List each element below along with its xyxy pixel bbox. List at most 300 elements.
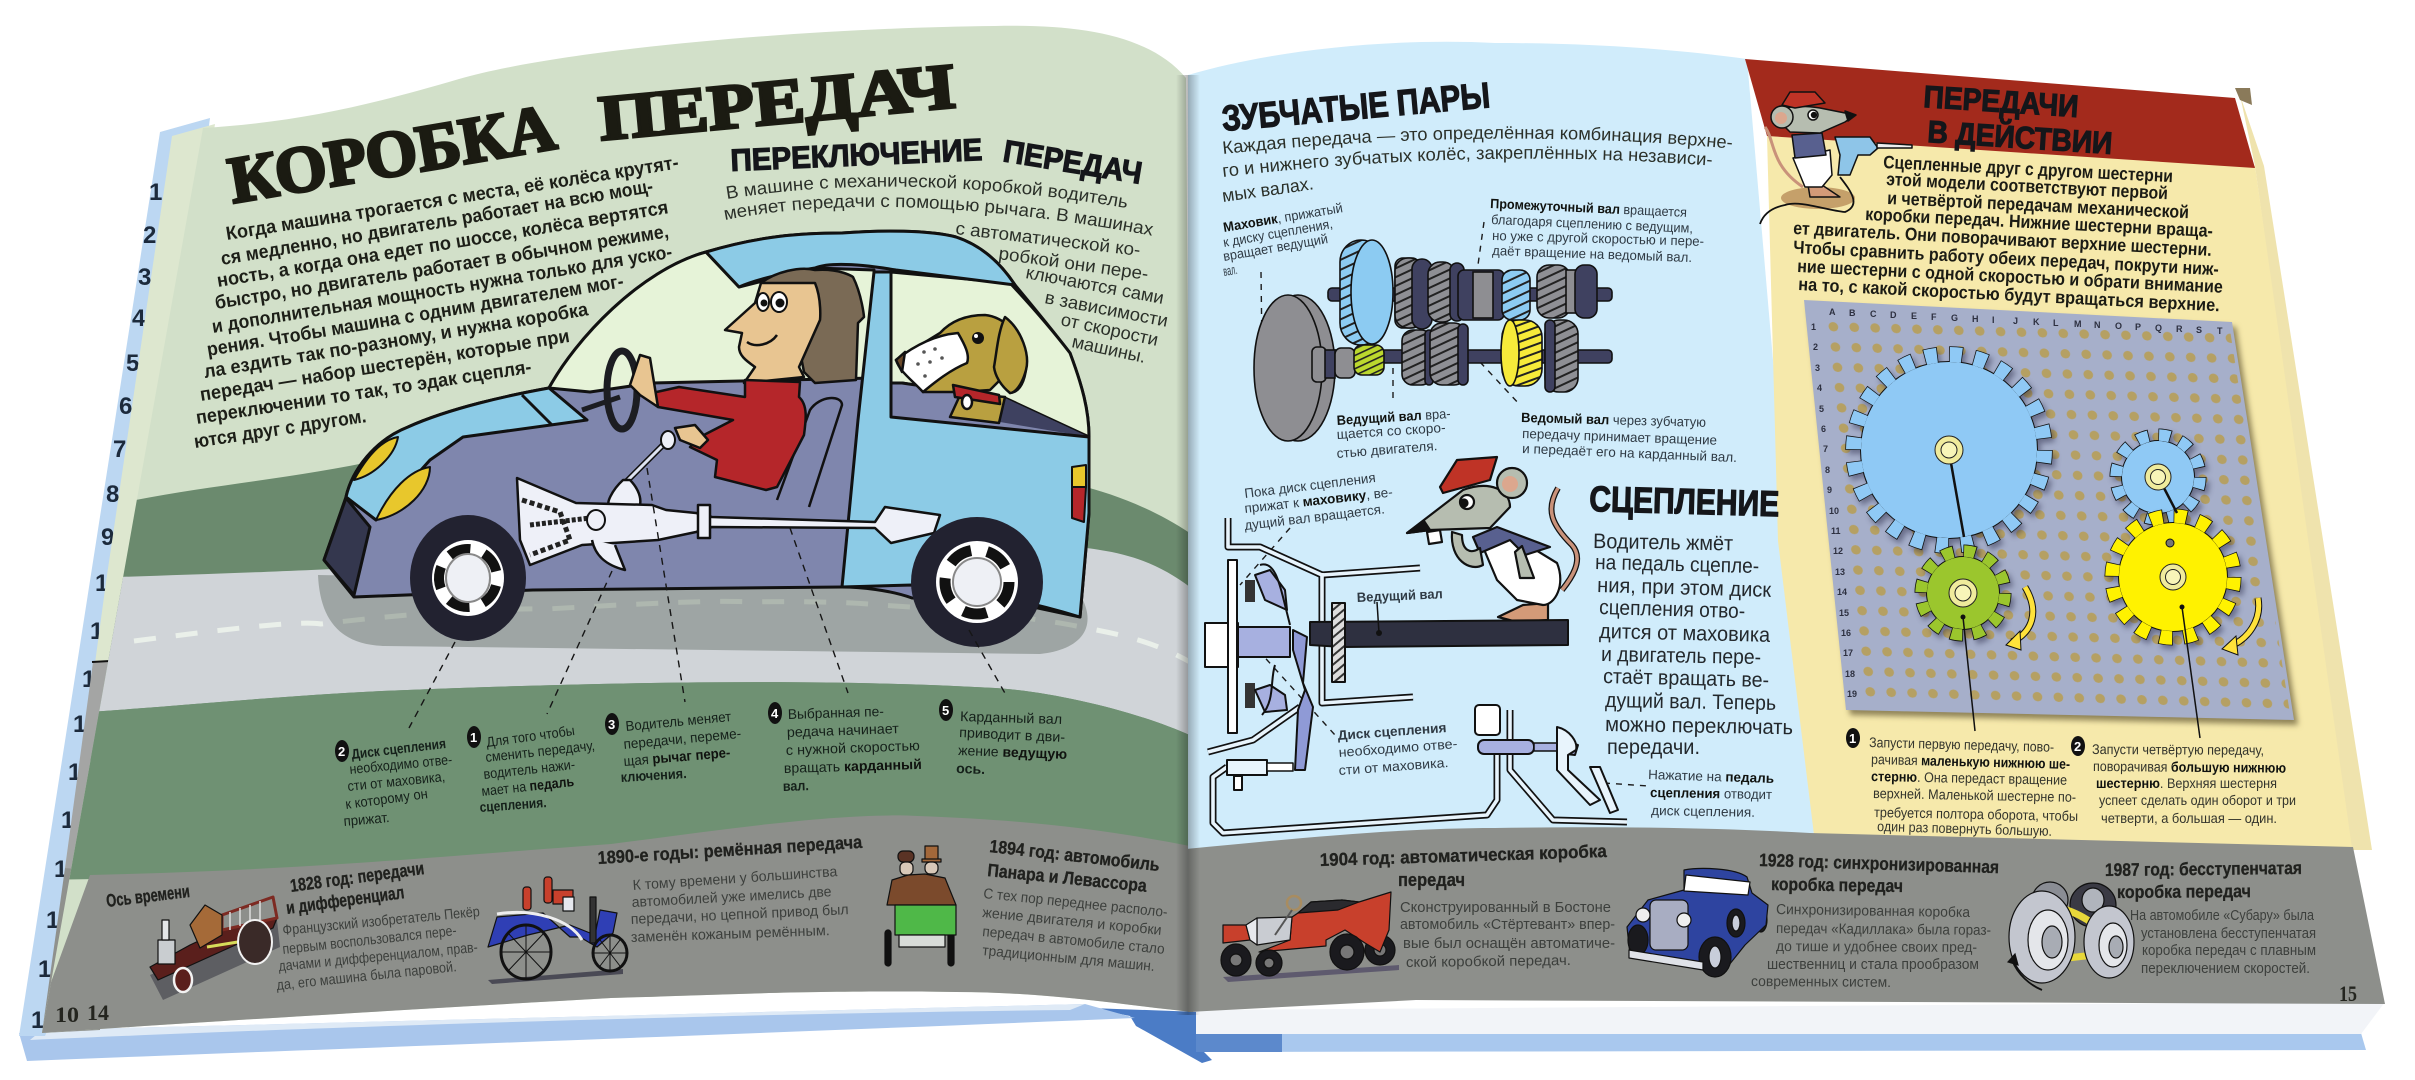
countershaft caption: Промежуточный вал вращается — [1490, 196, 1687, 220]
entry 1928: 1928 год: синхронизированная — [1759, 850, 1999, 877]
row numbers: 7 — [1823, 444, 1828, 454]
entry 1890s: 1890-е годы: ремённая передача — [597, 832, 864, 868]
row numbers: 14 — [1837, 587, 1847, 597]
left page stack with number index: 14 — [68, 759, 95, 786]
instructions — [1846, 728, 2296, 839]
step 3: ключения. — [620, 765, 687, 785]
intro text: ла ездить так по-разному, и нужна коробка — [202, 299, 590, 383]
step 4: Выбранная пе- — [788, 703, 884, 722]
step 5: ось. — [956, 760, 985, 777]
output shaft caption — [1521, 410, 1737, 465]
instruction 1: требуется полтора оборота, чтобы — [1874, 804, 2078, 824]
last grey gear — [1545, 320, 1578, 392]
row numbers: 15 — [1839, 608, 1849, 618]
panel: left page — [42, 26, 1193, 1033]
entry 1904: вые был оснащён автоматиче- — [1403, 936, 1615, 952]
step 5 — [939, 699, 1067, 777]
step 2: сти от маховика, — [347, 768, 446, 794]
column letters: G — [1951, 313, 1958, 323]
clutch text: дущий вал. Теперь — [1605, 689, 1776, 715]
step 2: необходимо отве- — [349, 751, 453, 777]
page number right: 15 — [2339, 981, 2357, 1006]
green gear — [1921, 551, 2005, 635]
input shaft caption: Ведущий вал вра- — [1336, 406, 1451, 428]
upper shaft — [1328, 288, 1612, 301]
column letters: Q — [2155, 323, 2162, 333]
column letters — [1829, 307, 2223, 336]
entry 1894: передач в автомобиле стало — [982, 924, 1165, 958]
paper edge — [2240, 95, 2372, 850]
left page stack with number index: 7 — [113, 436, 126, 463]
step 2: к которому он — [344, 785, 429, 812]
output shaft caption: и передаёт его на карданный вал. — [1522, 441, 1737, 465]
windshield — [549, 252, 874, 392]
pedal master cylinder — [1475, 705, 1500, 735]
clutch disk label — [1337, 720, 1458, 778]
heading: gears in action: ПЕРЕДАЧИ — [1923, 79, 2079, 124]
step 5: Карданный вал — [960, 708, 1062, 727]
clutch caption: Пока диск сцепления — [1244, 470, 1376, 501]
instruction 1: рачивая маленькую нижнюю ше- — [1871, 751, 2071, 772]
gears in action text: и четвёртой передачам механической — [1887, 188, 2189, 222]
callouts: numbered steps — [335, 699, 1067, 829]
flywheel caption: вал. — [1222, 262, 1238, 279]
car shadow — [318, 575, 1088, 654]
white block — [1205, 623, 1238, 667]
left page stack with number index: 2 — [143, 222, 156, 249]
intro text: переключении то так, то эдак сцепля- — [195, 357, 533, 429]
step 4: 4 — [771, 706, 779, 721]
column letters: H — [1972, 314, 1978, 324]
step 5: жение ведущую — [958, 742, 1067, 762]
timeline: left page — [105, 832, 1168, 994]
clutch text: сцепления отво- — [1599, 596, 1745, 623]
clutch caption: прижат к маховику, ве- — [1244, 484, 1393, 516]
row numbers: 13 — [1835, 567, 1845, 577]
board — [1804, 300, 2294, 720]
cream panel — [1767, 136, 2352, 848]
pedal label: Нажатие на педаль — [1648, 767, 1774, 786]
arm — [1515, 546, 1534, 578]
instruction 2: 2 — [2074, 739, 2081, 754]
output shaft caption: передачу принимает вращение — [1522, 426, 1717, 448]
entry 1894: 1894 год: автомобиль — [989, 836, 1161, 875]
gear pairs text: Каждая передача — это определённая комбинация верхне- — [1223, 126, 1732, 154]
entry 1987: установлена бесступенчатая — [2141, 926, 2316, 942]
entry 1904 — [1319, 841, 1615, 971]
entry 1890s — [597, 832, 864, 946]
ear — [1497, 468, 1527, 498]
roof — [706, 231, 1015, 287]
heading: clutch: СЦЕПЛЕНИЕ — [1589, 478, 1780, 524]
teeth — [1427, 530, 1442, 544]
yellow gear — [1502, 320, 1542, 386]
clutch text: передачи. — [1607, 736, 1700, 759]
column letters: R — [2176, 324, 2183, 334]
entry 1928: передач «Кадиллака» была гораз- — [1776, 921, 1991, 939]
entry 1928 — [1751, 850, 1999, 991]
gear shifting text: меняет передачи с помощью рычага. В машинах — [724, 197, 1154, 236]
intro text: Когда машина трогается с места, её колёса крутят- — [224, 153, 680, 245]
page title: КОРОБКА — [223, 91, 561, 218]
shirt — [1473, 527, 1550, 555]
row numbers: 5 — [1819, 404, 1824, 414]
row numbers: 6 — [1821, 424, 1826, 434]
clutch text: Водитель жмёт — [1593, 530, 1734, 555]
left cover — [19, 1004, 1135, 1061]
row numbers: 18 — [1845, 669, 1855, 679]
right passenger — [925, 846, 938, 861]
intro text: передач — набор шестерён, которые при — [198, 326, 571, 406]
grey gears right upper — [1537, 265, 1570, 318]
instruction 2: поворачивая большую нижнюю — [2093, 758, 2286, 776]
hood — [346, 388, 587, 520]
front wheel — [410, 515, 526, 641]
small blue gear — [1502, 270, 1530, 320]
cap — [1782, 92, 1825, 108]
intro text: и дополнительная мощность нужна только для уско- — [210, 242, 674, 338]
instruction 2: Запусти четвёртую передачу, — [2092, 741, 2264, 758]
step 4: редача начинает — [787, 720, 900, 740]
intro text: ность, а когда она едет по шоссе, колёса вертятся — [215, 197, 670, 292]
gears in action text: Чтобы сравнить работу обеих передач, покрути ниж- — [1793, 237, 2219, 279]
large blue gear — [1854, 354, 2044, 546]
under page strip — [42, 124, 215, 1033]
entry 1894 — [982, 836, 1168, 975]
intro text: быстро, но двигатель работает в обычном режиме, — [213, 221, 670, 314]
column letters: N — [2094, 320, 2100, 330]
road dashes — [134, 601, 1190, 662]
steering wheel — [607, 351, 637, 429]
step 5: 5 — [942, 703, 949, 718]
eye — [1460, 495, 1474, 509]
column letters: P — [2135, 322, 2141, 332]
row numbers: 8 — [1825, 465, 1830, 475]
left page stack with number index: 12 — [82, 666, 109, 693]
entry 1987: коробка передач — [2117, 881, 2251, 902]
instruction 1: Запусти первую передачу, пово- — [1869, 734, 2055, 755]
clutch caption: дущий вал вращается. — [1244, 501, 1385, 533]
column letters: T — [2217, 326, 2223, 336]
row numbers: 4 — [1817, 383, 1822, 393]
entry 1987 — [2105, 858, 2316, 977]
entry 1890s: передачи, но цепной привод был — [630, 902, 849, 928]
gear shifting text: робкой они пере- — [997, 243, 1150, 284]
row numbers: 10 — [1829, 506, 1839, 516]
column letters: A — [1829, 307, 1836, 317]
instruction 1: стерню. Она передаст вращение — [1871, 768, 2067, 788]
icon: red car — [1221, 892, 1399, 982]
row numbers: 2 — [1813, 342, 1818, 352]
feet — [1498, 603, 1548, 622]
entry 1904: автомобиль «Стёртевант» впер- — [1400, 917, 1615, 933]
hill — [90, 455, 1200, 760]
left page stack with number index: 19 — [31, 1007, 58, 1034]
clutch text: можно переключать — [1605, 713, 1793, 739]
heading: gear shifting: ПЕРЕКЛЮЧЕНИЕ — [730, 132, 983, 178]
rear body panel — [842, 272, 1089, 617]
left page stack with number index — [19, 118, 210, 1036]
step 1: водитель нажи- — [483, 756, 576, 782]
grey gears upper — [1395, 258, 1420, 328]
entry 1828: да, его машина была паровой. — [276, 959, 457, 994]
road — [90, 545, 1200, 740]
intro text: рения. Чтобы машина с одним двигателем мог- — [205, 271, 625, 361]
instruction 1: 1 — [1849, 731, 1856, 746]
clutch lever — [1293, 630, 1313, 770]
left page stack with number index: 8 — [106, 481, 119, 508]
timeline: right page — [1319, 841, 2316, 991]
rear interior — [874, 383, 1089, 437]
nose — [1845, 111, 1856, 121]
entry 1894: традиционным для машин. — [982, 943, 1155, 975]
sweater — [652, 380, 806, 490]
input shaft — [1310, 620, 1568, 647]
entry 1904: Сконструированный в Бостоне — [1400, 900, 1611, 916]
step 1: Для того чтобы — [485, 722, 576, 750]
row numbers: 17 — [1843, 648, 1853, 658]
flywheel caption: вращает ведущий — [1222, 231, 1329, 264]
left page stack with number index: 3 — [138, 264, 151, 291]
entry 1928: современных систем. — [1751, 974, 1891, 991]
page numbers left: 14 — [87, 1000, 109, 1025]
row numbers: 16 — [1841, 628, 1851, 638]
intro text — [193, 153, 680, 453]
step 4: вал. — [783, 777, 809, 794]
pressure parts — [1238, 627, 1290, 657]
page title — [223, 50, 958, 218]
step 1 — [467, 722, 596, 815]
under page text: Ос — [69, 893, 94, 914]
page numbers left — [55, 1000, 109, 1027]
intro text: ся медленно, но двигатель работает на всю мощ- — [219, 176, 655, 270]
row numbers: 9 — [1827, 485, 1832, 495]
icon: blue tricycle — [488, 877, 627, 984]
row numbers — [1811, 322, 1857, 699]
gear hands — [1951, 463, 2200, 738]
head — [1775, 106, 1855, 133]
hose cylinder — [1227, 760, 1267, 775]
illustration: mouse mechanic — [1407, 457, 1577, 622]
step 3: 3 — [608, 717, 615, 732]
driver face — [725, 283, 820, 383]
headlights — [354, 437, 398, 480]
step 3: передачи, переме- — [623, 725, 742, 752]
heading: gear pairs: ЗУБЧАТЫЕ ПАРЫ — [1220, 74, 1492, 139]
left page stack with number index: 9 — [101, 524, 114, 551]
step 3 — [605, 708, 742, 785]
ear — [1771, 106, 1793, 128]
step 4: с нужной скоростью — [786, 737, 920, 758]
heading: gears in action: В ДЕЙСТВИИ — [1927, 113, 2113, 161]
pedal label: диск сцепления. — [1651, 803, 1755, 820]
instruction 1: верхней. Маленькой шестерне по- — [1873, 785, 2077, 805]
feet — [1808, 185, 1840, 197]
gear shifting text: в зависимости — [1043, 287, 1170, 331]
column letters: E — [1911, 311, 1917, 321]
illustration: clutch assembly — [1205, 518, 1627, 833]
gears in action text — [1793, 152, 2223, 315]
flywheel caption: Маховик, прижатый — [1222, 200, 1344, 235]
pedal label: сцепления отводит — [1650, 785, 1772, 802]
flywheel — [1261, 295, 1335, 441]
gear shifting text: машины. — [1070, 331, 1148, 367]
entry 1890s: автомобилей уже имелись две — [631, 884, 832, 911]
instruction 2 — [2071, 736, 2296, 826]
gear lever — [625, 440, 668, 483]
column letters: I — [1992, 315, 1995, 325]
board holes — [1824, 316, 2290, 714]
entry 1904: 1904 год: автоматическая коробка — [1319, 841, 1608, 870]
flywheel caption — [1222, 200, 1344, 279]
eye — [1808, 110, 1818, 120]
illustration: gearbox — [1254, 240, 1612, 441]
left passenger — [898, 851, 914, 862]
tail — [1551, 488, 1577, 590]
row numbers: 12 — [1833, 546, 1843, 556]
countershaft caption: но уже с другой скоростью и пере- — [1492, 228, 1704, 249]
clutch text: стаёт вращать ве- — [1603, 665, 1769, 692]
entry 1828: и дифференциал — [285, 882, 405, 918]
large blue gear — [1340, 240, 1382, 345]
lower green — [40, 682, 1200, 880]
dashed callout lines — [409, 468, 1006, 728]
grey timeline strip right — [1186, 827, 2385, 1012]
clutch disk label: необходимо отве- — [1338, 736, 1458, 760]
clutch caption — [1244, 470, 1393, 533]
car body — [324, 231, 1089, 617]
left page stack with number index: 1 — [149, 179, 162, 206]
column letters: B — [1849, 308, 1856, 318]
heading: gear shifting — [730, 132, 1145, 191]
icon: continuously variable transmission — [2008, 882, 2134, 990]
cord — [1760, 177, 1854, 224]
row numbers: 11 — [1831, 526, 1841, 536]
flange — [1332, 603, 1345, 682]
clutch text: на педаль сцепле- — [1595, 551, 1759, 578]
step 2 — [335, 735, 453, 829]
step 3: щая рычаг пере- — [623, 744, 731, 769]
gearbox and shaft — [517, 478, 940, 565]
heading: gears in action — [1923, 79, 2113, 161]
entry 1828: дачами и дифференциалом, прав- — [278, 940, 479, 975]
entry 1987: коробка передач с плавным — [2142, 943, 2316, 959]
yellow-green gear — [1354, 345, 1384, 375]
step 1: мает на педаль — [481, 773, 575, 799]
cap — [1440, 457, 1497, 493]
arrow: yellow gear rotation — [2222, 598, 2259, 655]
dashed callouts gearbox — [1240, 222, 1648, 786]
row numbers: 3 — [1815, 363, 1820, 373]
column letters: J — [2013, 316, 2018, 326]
left page stack with number index: 16 — [54, 856, 81, 883]
column letters: D — [1890, 310, 1897, 320]
entry 1987: 1987 год: бесступенчатая — [2105, 858, 2302, 880]
left page stack with number index: 11 — [90, 618, 115, 645]
rear light — [1072, 465, 1086, 487]
gear pairs text: мых валах. — [1221, 173, 1315, 206]
arrow: green gear rotation — [2006, 587, 2033, 650]
yellow gear — [2112, 516, 2234, 638]
driver hair — [761, 269, 864, 383]
row numbers: 1 — [1811, 322, 1816, 332]
entry 1928: шественниц и стала прообразом — [1767, 957, 1979, 973]
entry 1904: передач — [1398, 870, 1465, 890]
captions around gearbox — [1222, 196, 1737, 533]
column letters: F — [1931, 312, 1937, 322]
left page stack with number index: 5 — [126, 350, 139, 377]
flywheel caption: к диску сцепления, — [1222, 216, 1334, 250]
step 1: 1 — [470, 730, 477, 745]
step 5: приводит в дви- — [959, 724, 1066, 745]
icon: steam vehicle — [150, 897, 280, 1000]
plate — [1228, 560, 1237, 733]
dog — [896, 315, 1027, 423]
gears in action text: Сцепленные друг с другом шестерни — [1883, 152, 2173, 186]
entry 1928: коробка передач — [1771, 874, 1903, 896]
entry 1890s: К тому времени у большинства — [632, 864, 839, 894]
apron — [1483, 530, 1560, 605]
grille — [324, 498, 370, 595]
input shaft label: Ведущий вал — [1356, 586, 1443, 605]
step 2: прижат. — [343, 809, 390, 829]
panel: right page — [1180, 30, 2385, 1012]
timeline label: Ось времени — [105, 881, 191, 911]
left page stack with number index: 13 — [73, 711, 100, 738]
input shaft caption — [1336, 406, 1451, 461]
shirt — [1792, 133, 1826, 158]
clutch disk label: Диск сцепления — [1337, 720, 1447, 743]
column letters: K — [2033, 317, 2040, 327]
clutch labels — [1337, 586, 1774, 820]
entry 1904: ской коробкой передач. — [1406, 953, 1571, 971]
apron — [1793, 150, 1832, 187]
entry 1928: Синхронизированная коробка — [1776, 902, 1971, 921]
column letters: O — [2115, 321, 2122, 331]
gutter shadow — [1176, 75, 1200, 1015]
column letters: S — [2196, 325, 2202, 335]
instruction 2: четверти, а большая — один. — [2101, 810, 2277, 826]
gears in action text: коробки передач. Нижние шестерни враща- — [1865, 204, 2213, 241]
left page stack with number index: 10 — [95, 570, 122, 597]
rear wheel — [911, 517, 1043, 647]
step 1: сцепления. — [479, 794, 547, 815]
tail — [1765, 127, 1803, 187]
gears in action text: на то, с какой скоростью будут вращаться верхние. — [1798, 274, 2220, 315]
grey gears lower — [1402, 330, 1432, 385]
right cover and page stack — [1196, 1002, 2385, 1052]
input shaft caption: стью двигателя. — [1336, 438, 1438, 461]
clutch text: ния, при этом диск — [1597, 574, 1772, 602]
gear pairs text: го и нижнего зубчатых колёс, закреплённых на независи- — [1223, 146, 1712, 177]
spine of the book — [1090, 1008, 1212, 1063]
gear shifting text: с автоматической ко- — [955, 218, 1142, 260]
entry 1828 — [276, 858, 480, 994]
clutch text: и двигатель пере- — [1601, 643, 1761, 669]
seat — [777, 398, 842, 507]
left page stack with number index: 6 — [119, 393, 132, 420]
left page stack with number index: 4 — [132, 305, 146, 332]
light blue page — [1180, 30, 1820, 860]
countershaft caption: даёт вращение на ведомый вал. — [1492, 243, 1692, 265]
column letters: L — [2053, 318, 2059, 328]
housing pipes — [1208, 518, 1627, 833]
step 4 — [768, 702, 922, 794]
head — [1407, 486, 1510, 533]
page numbers left: 10 — [55, 1002, 79, 1027]
entry 1928: до тише и удобнее своих пред- — [1776, 939, 1977, 956]
step 4: вращать карданный — [784, 756, 922, 776]
